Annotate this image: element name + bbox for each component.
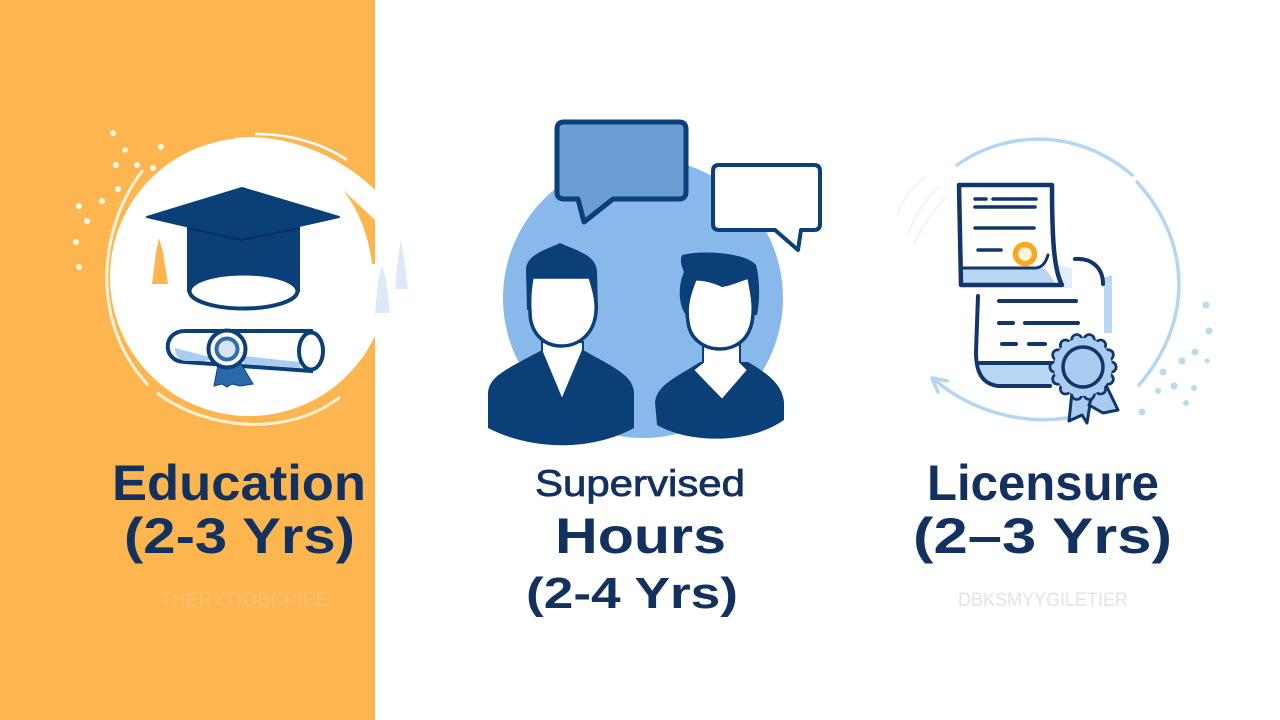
heading: education: (2-3 Yrs) [124,508,355,564]
lower document [976,259,1118,423]
white brush circle [107,134,388,424]
icon: supervised hours [488,122,820,445]
icon: education badge [73,130,408,424]
person: right [655,252,784,439]
pale tassels [375,240,408,313]
faint motion lines [897,177,948,245]
panel: orange education background [0,0,375,720]
teal dots [1138,302,1212,416]
white dots [73,130,164,270]
orange tassel [152,238,168,284]
heading: supervised hours: Supervised [535,463,745,504]
diploma scroll [168,330,323,387]
icon: licensure [897,139,1212,423]
speech bubble: white [713,165,820,250]
person: left [488,243,634,445]
speech bubble: blue [557,122,686,222]
heading: supervised hours: Hours [555,508,726,564]
caption: education: THERYTIOBCPIEE [160,590,328,611]
graduation cap [147,188,339,308]
heading: education [112,455,366,564]
orange certificate seal [1016,244,1034,264]
circular arrow ring [932,139,1179,420]
heading: licensure: Licensure [927,455,1159,511]
heading: supervised hours [526,463,745,618]
heading: licensure: (2–3 Yrs) [913,508,1172,564]
heading: supervised hours: (2-4 Yrs) [526,569,738,618]
upper certificate [959,185,1064,285]
caption: licensure: DBKSMYYGILETIER [958,590,1128,611]
blue circle [503,158,783,438]
ribbon seal [1048,333,1118,423]
heading: licensure [913,455,1172,564]
heading: education: Education [112,455,366,511]
